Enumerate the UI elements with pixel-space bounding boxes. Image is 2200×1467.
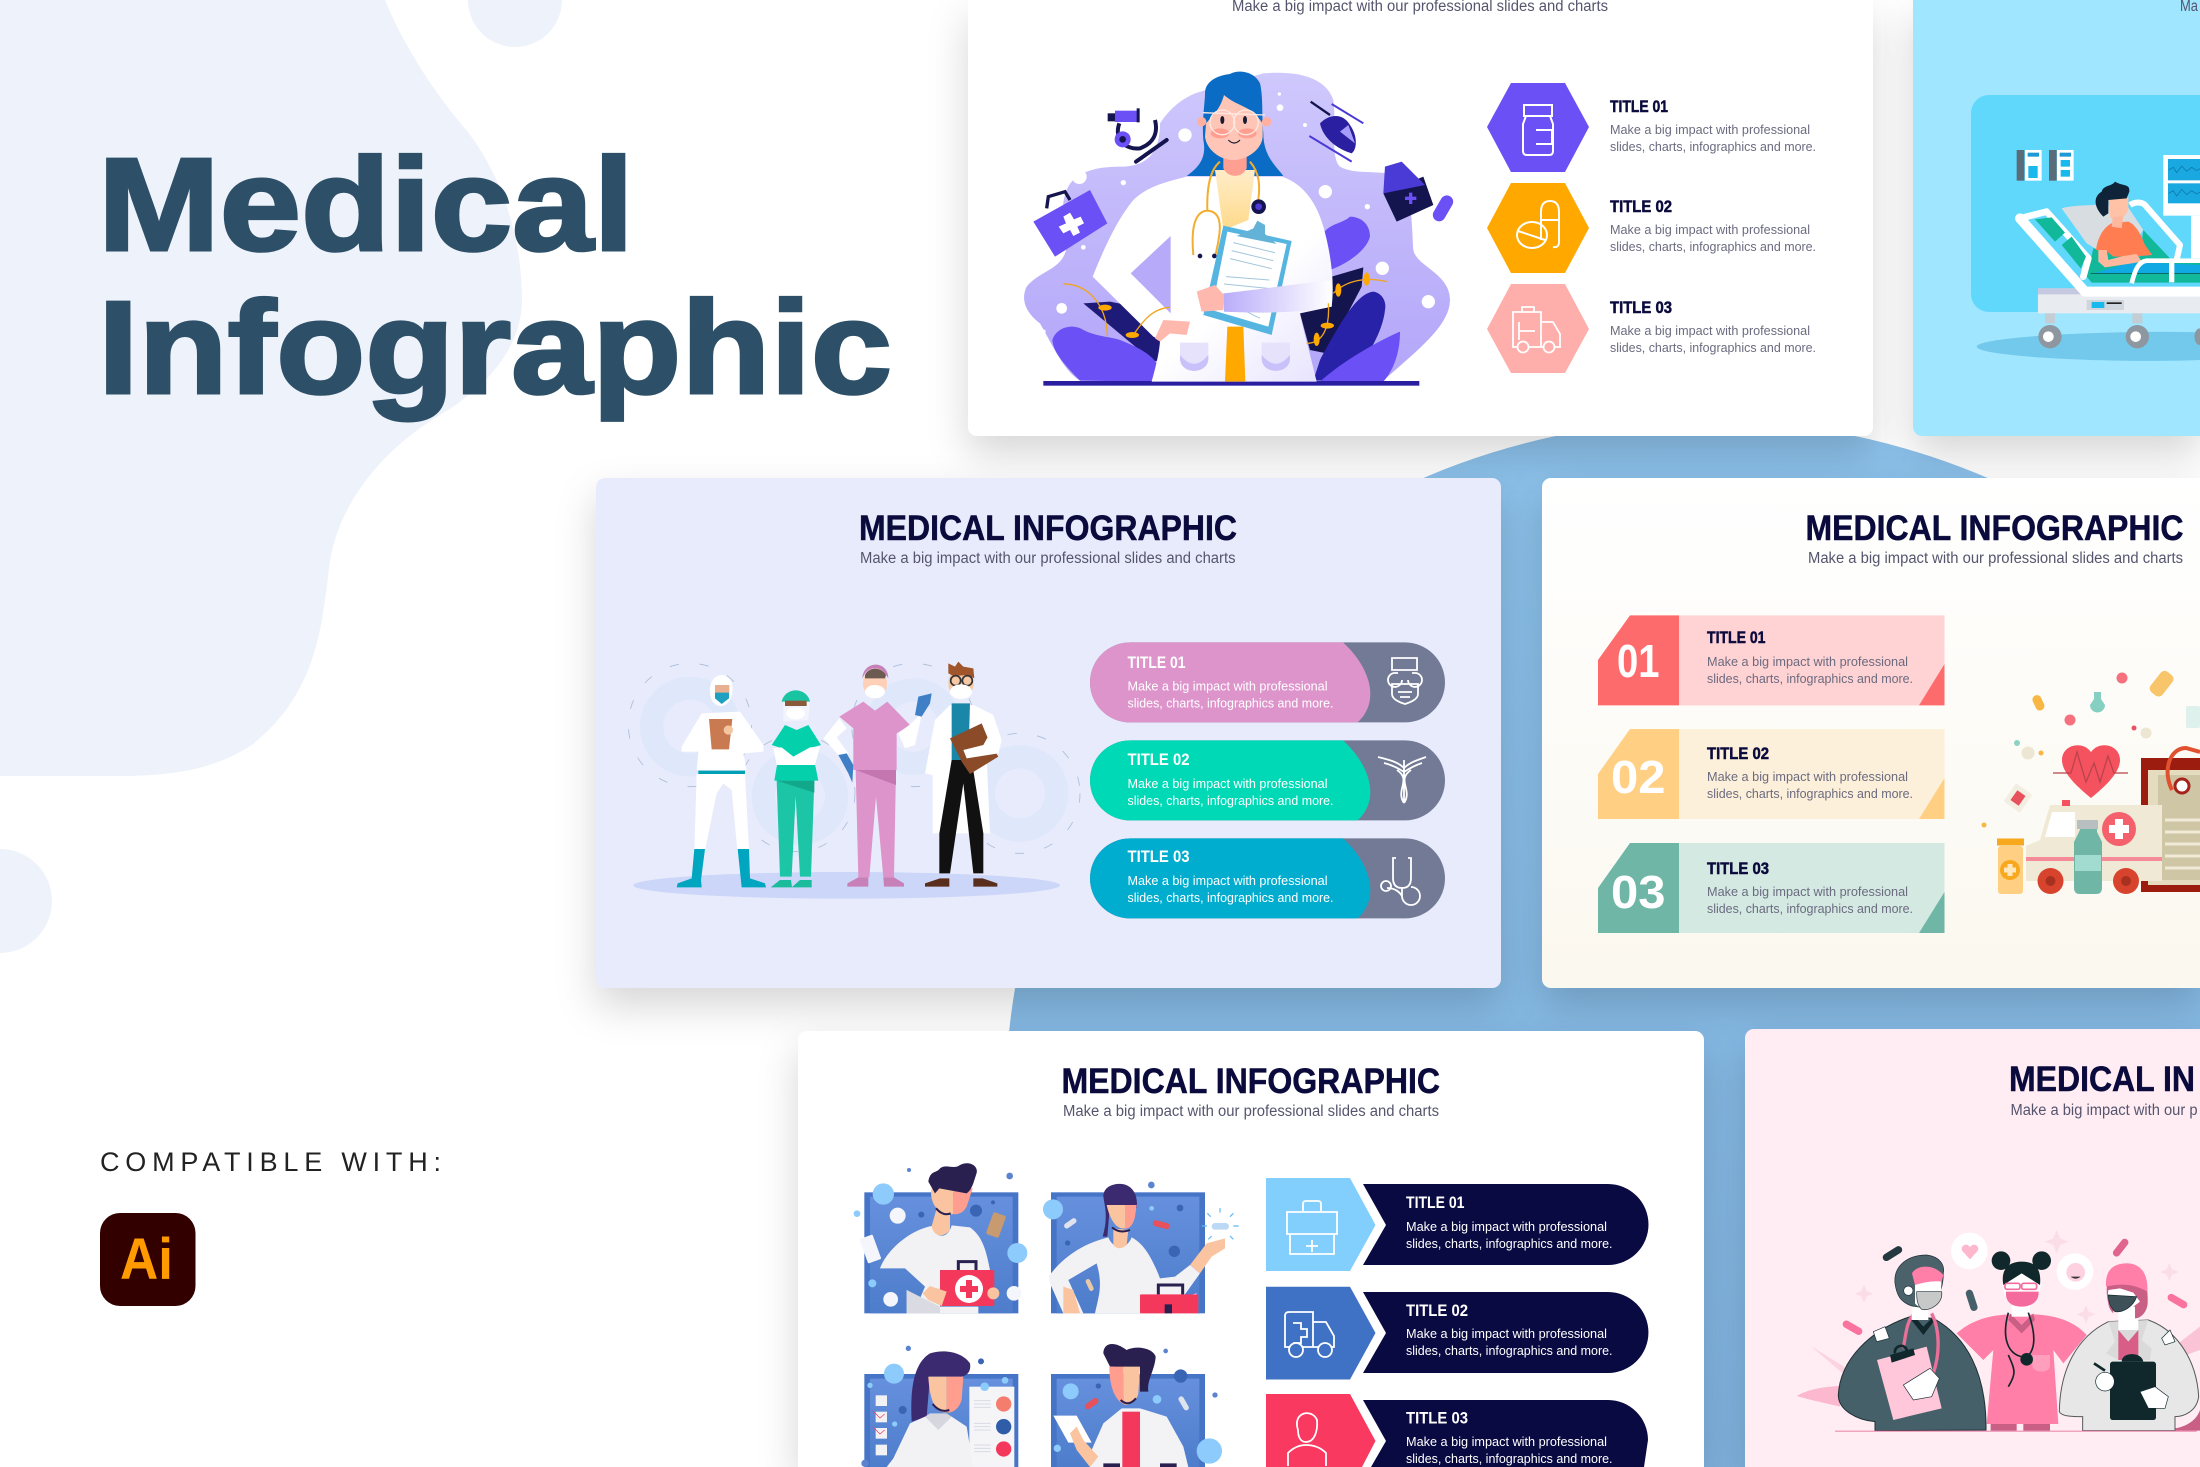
panel: pink team slide <box>1745 1029 2200 1467</box>
panel: doctor slide <box>968 0 1873 436</box>
numbered row 01: slides, charts, infographics and more. <box>1707 672 1913 686</box>
numbered row 03: slides, charts, infographics and more. <box>1707 902 1913 916</box>
numbered row 01: TITLE 01 <box>1707 628 1766 647</box>
text: title 01: slides, charts, infographics and more. <box>1610 140 1816 154</box>
main title: Infographic <box>98 274 892 421</box>
portrait: woman with chart <box>861 1346 1018 1467</box>
worker: white coat <box>2059 1263 2199 1431</box>
arrow row 01: TITLE 01 <box>1406 1193 1464 1212</box>
numbered row 02: 02 <box>1611 751 1666 803</box>
numbered row 03: TITLE 03 <box>1707 859 1769 878</box>
arrow row 03: slides, charts, infographics and more. <box>1406 1452 1612 1466</box>
compatible with label: COMPATIBLE WITH: <box>100 1147 441 1177</box>
person: pink scrubs <box>823 665 932 887</box>
arrow row 01: slides, charts, infographics and more. <box>1406 1237 1612 1251</box>
numbered row 02: TITLE 02 <box>1707 744 1769 763</box>
panel: team portrait slide <box>798 1031 1704 1467</box>
portrait: man with red kit <box>854 1163 1027 1313</box>
icon: Adobe Illustrator: Ai <box>120 1227 173 1292</box>
portrait: doctor with report <box>1051 1344 1222 1467</box>
text: title 01 <box>1610 97 1816 154</box>
icon: medical kit right <box>1383 162 1455 224</box>
floating pills <box>1841 1237 2189 1336</box>
person: hazmat suit <box>677 675 766 887</box>
pill row 03 <box>1090 838 1445 918</box>
text: title 03: TITLE 03 <box>1610 298 1672 317</box>
pill row 02: Make a big impact with professional <box>1128 777 1328 791</box>
panel: numbered rows slide <box>1542 478 2200 988</box>
icon: microscope <box>1108 108 1167 162</box>
main title: Medical <box>98 131 634 278</box>
person: green scrubs <box>771 690 821 887</box>
stethoscope <box>1193 162 1259 257</box>
arrow row 02: TITLE 02 <box>1406 1301 1468 1320</box>
panel: team slide <box>596 478 1501 988</box>
slide heading: MEDICAL INFOGRAPHIC <box>1062 1062 1440 1101</box>
text: title 01: Make a big impact with professional <box>1610 123 1810 137</box>
hexagon icon 03 <box>1487 284 1589 373</box>
wall devices <box>2017 150 2074 181</box>
pill row 02: slides, charts, infographics and more. <box>1128 794 1334 808</box>
panel: hospital bed slide <box>1913 0 2200 436</box>
numbered row 03 <box>1598 843 1944 933</box>
icon: medical kit left <box>1033 190 1107 257</box>
background blob <box>0 0 562 953</box>
arrow row 03: TITLE 03 <box>1406 1408 1468 1428</box>
bed frame <box>2020 218 2200 292</box>
numbered row 01: Make a big impact with professional <box>1707 655 1908 669</box>
numbered row 03: Make a big impact with professional <box>1707 885 1908 899</box>
pill row 02: TITLE 02 <box>1128 750 1190 769</box>
blue background circle <box>1005 420 2200 1467</box>
illustration: medical team <box>628 662 1080 899</box>
bed base and wheels <box>2038 288 2200 313</box>
text: title 03: slides, charts, infographics and more. <box>1610 341 1816 355</box>
pill row 01: Make a big impact with professional <box>1128 680 1328 694</box>
numbered row 02: slides, charts, infographics and more. <box>1707 787 1913 801</box>
numbered row 02: Make a big impact with professional <box>1707 770 1908 784</box>
arrow row 03 <box>1266 1394 1648 1467</box>
slide heading: MEDICAL INFOGRAPHIC <box>859 509 1237 548</box>
inner panel <box>1971 95 2200 312</box>
pill row 01: TITLE 01 <box>1128 653 1186 672</box>
pill row 01 <box>1090 642 1445 722</box>
arrow row 01: Make a big impact with professional <box>1406 1220 1607 1234</box>
main title <box>98 131 892 421</box>
neck and face <box>1223 150 1247 176</box>
vines <box>1063 279 1387 343</box>
hexagon icon 02 <box>1487 183 1589 273</box>
slide subtitle: Make a big impact with our professional slides and charts <box>860 550 1236 567</box>
pill row 03: Make a big impact with professional <box>1128 874 1328 888</box>
illustration: ambulance and medical items <box>1982 669 2200 894</box>
icon: helicopter <box>1309 102 1363 162</box>
arrow row 03: Make a big impact with professional <box>1406 1435 1607 1449</box>
numbered row 01 <box>1598 615 1944 705</box>
arrow row 01 <box>1266 1178 1648 1271</box>
hexagon icon 01 <box>1487 83 1589 172</box>
illustration: doctor with medical items <box>1024 72 1455 386</box>
portrait: woman with pill <box>1043 1182 1239 1313</box>
illustration: three healthcare workers <box>1797 1230 2200 1432</box>
pill row 03: TITLE 03 <box>1128 847 1190 866</box>
text: title 02: Make a big impact with professional <box>1610 223 1810 237</box>
text: title 03: Make a big impact with professional <box>1610 324 1810 338</box>
arrow row 02: slides, charts, infographics and more. <box>1406 1344 1612 1358</box>
illustration: patient in bed <box>1977 150 2200 361</box>
numbered row 02 <box>1598 729 1944 819</box>
arrow row 02 <box>1266 1287 1648 1380</box>
text: title 02: slides, charts, infographics and more. <box>1610 240 1816 254</box>
lab coat <box>1093 177 1333 382</box>
mattress <box>2087 230 2200 283</box>
arrow row 02: Make a big impact with professional <box>1406 1327 1607 1341</box>
slide subtitle: Make a big impact with our professional slides and charts <box>1808 550 2183 567</box>
numbered row 03: 03 <box>1611 866 1666 918</box>
text: title 03 <box>1610 298 1816 355</box>
pill row 02 <box>1090 740 1445 820</box>
worker: dark scrubs <box>1838 1255 1986 1431</box>
slide subtitle: Make a big impact with our professional slides and charts <box>1063 1103 1439 1120</box>
hair <box>1187 72 1283 176</box>
pill row 01: slides, charts, infographics and more. <box>1128 696 1334 710</box>
clipboard <box>1203 226 1292 335</box>
text: title 02: TITLE 02 <box>1610 197 1672 216</box>
person: doctor <box>925 662 1002 887</box>
side rail <box>2130 202 2180 260</box>
pill row 03: slides, charts, infographics and more. <box>1128 891 1334 905</box>
heart monitor <box>2163 155 2200 259</box>
text: title 01: TITLE 01 <box>1610 97 1668 116</box>
speech bubbles <box>1951 1233 2093 1290</box>
pillow <box>2062 205 2143 263</box>
numbered row 01: 01 <box>1617 635 1660 687</box>
patient <box>2096 182 2152 267</box>
arm and hands <box>1223 280 1332 313</box>
worker: pink scrubs <box>1957 1251 2087 1431</box>
text: title 02 <box>1610 197 1816 254</box>
icon: Adobe Illustrator <box>100 1213 196 1306</box>
